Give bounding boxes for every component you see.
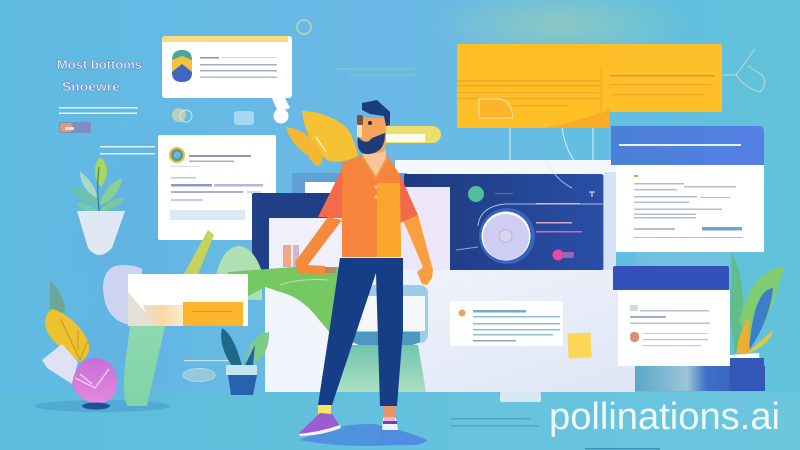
- green table leg: [124, 326, 165, 406]
- small button: [59, 122, 91, 133]
- plant: pink vase with leaves: [42, 281, 117, 410]
- thin connector lines: [510, 49, 765, 188]
- chair: [330, 285, 428, 392]
- lines left of card: [100, 146, 155, 154]
- person: [295, 100, 433, 446]
- sleeves: [318, 163, 350, 218]
- leaves behind head: [286, 111, 358, 166]
- card icon: [169, 147, 185, 163]
- yellow panel: [457, 44, 722, 128]
- yellow pill: [375, 126, 441, 143]
- heading text: [57, 57, 142, 114]
- face: [358, 118, 386, 153]
- shoes: [298, 413, 340, 436]
- plant: top left potted: [70, 157, 125, 255]
- footer lines: [451, 418, 660, 450]
- info card on monitor: [450, 301, 592, 359]
- shirt: [342, 155, 401, 257]
- socks and ankles: [318, 404, 331, 415]
- lines near top middle: [335, 68, 415, 76]
- beard: [358, 133, 385, 154]
- top right circle decoration: [297, 20, 311, 34]
- pot: [77, 211, 125, 255]
- trousers: [318, 258, 403, 406]
- lavender blob: [103, 265, 142, 325]
- callout tail: [272, 98, 290, 124]
- floor shadow left: [34, 400, 170, 412]
- list icon: [630, 332, 639, 342]
- monitor: white frame: [265, 160, 635, 402]
- mini bars: [283, 245, 299, 267]
- watermark: pollinations.ai: [549, 396, 780, 438]
- plant: right: [730, 252, 784, 391]
- monitor: dark screen: [252, 172, 616, 270]
- heading text: Most bottoms: [57, 57, 142, 72]
- card: top left: [162, 36, 292, 98]
- green hill: [215, 246, 340, 392]
- card icon: [172, 50, 192, 82]
- monitor: lilac window: [269, 187, 450, 270]
- heading text: Snoewre: [62, 79, 120, 94]
- card: right upper: [611, 126, 764, 252]
- dial widget: [456, 186, 604, 264]
- person shadow: [300, 424, 427, 446]
- arms: [295, 217, 342, 275]
- small pot plant: [183, 328, 269, 395]
- hair: [362, 100, 390, 126]
- left table card: [128, 274, 248, 326]
- base: [635, 252, 765, 391]
- card: middle left: [158, 135, 276, 240]
- card: right lower: [613, 266, 730, 366]
- decorative pills: [172, 108, 254, 125]
- neck: [362, 150, 386, 176]
- yellow stick: [184, 230, 214, 274]
